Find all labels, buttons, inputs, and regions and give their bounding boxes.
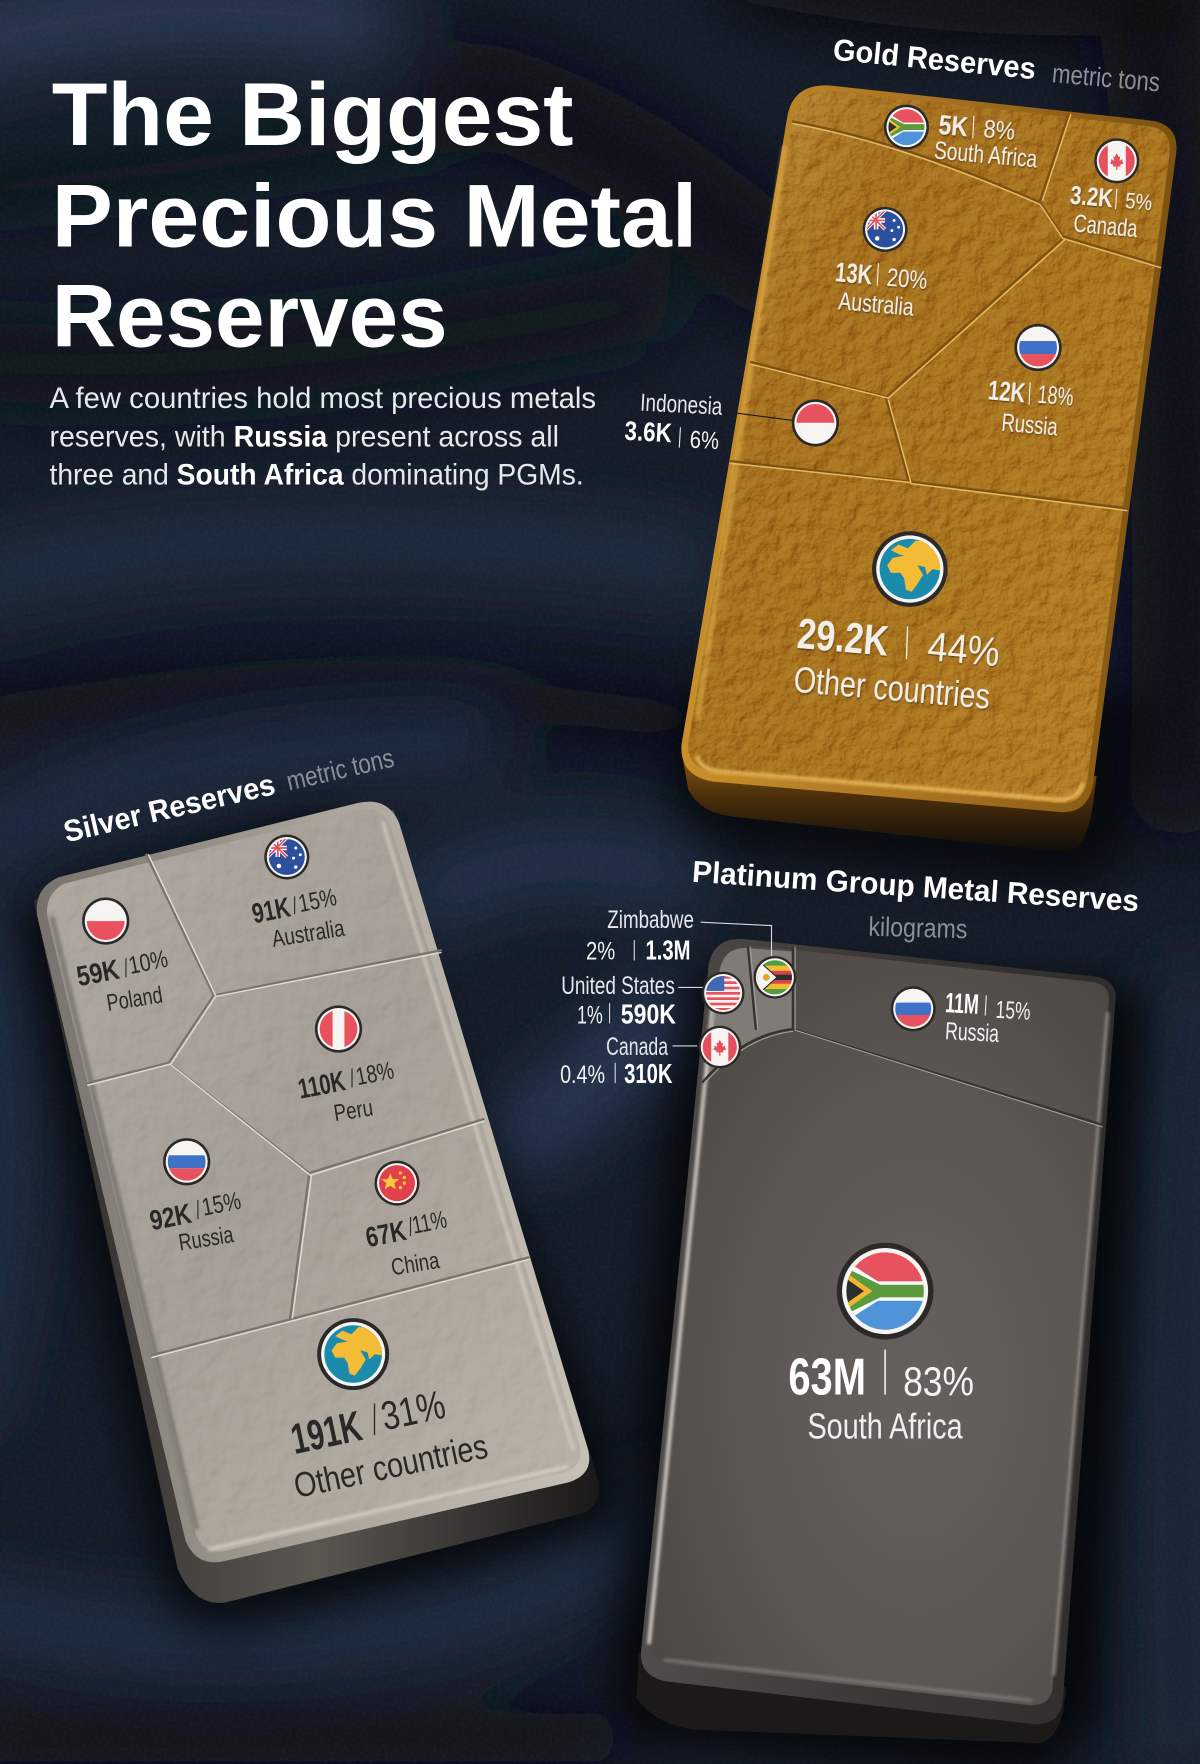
platinum: canada: Canada [606, 1034, 668, 1061]
heading: gold reserves: Gold Reserves [832, 34, 1037, 86]
platinum: canada: 0.4% [560, 1062, 605, 1089]
silver: poland: 10% [126, 946, 170, 980]
silver: russia: 15% [200, 1188, 243, 1222]
platinum: united states: 1% [577, 1002, 603, 1029]
subtitle text block: reserves, with Russia present across all [49, 421, 559, 453]
gold: russia: 18% [1036, 382, 1075, 412]
heading: gold reserves [832, 34, 1161, 97]
heading: silver reserves: Silver Reserves [61, 768, 278, 849]
gold: australia [834, 207, 928, 322]
silver bar [17, 802, 624, 1628]
gold: russia: 12K [987, 374, 1027, 409]
title [52, 65, 697, 365]
platinum: united states: United States [561, 973, 675, 1000]
subtitle text block: A few countries hold most precious metals [49, 383, 596, 415]
title: Reserves [52, 266, 448, 365]
silver: other countries [287, 1318, 491, 1506]
silver: china: China [389, 1248, 442, 1281]
gold: other countries: 29.2K [795, 610, 890, 666]
title: The Biggest [52, 65, 574, 164]
silver: peru [296, 1005, 396, 1127]
gold: south africa: 5K [937, 109, 970, 142]
gold: south africa: 8% [982, 116, 1016, 146]
silver: china [363, 1161, 449, 1281]
platinum: south africa: 83% [903, 1359, 974, 1405]
platinum: russia: Russia [944, 1018, 1000, 1048]
platinum: south africa: 63M [788, 1348, 866, 1406]
subtitle text block [49, 383, 596, 492]
platinum: canada [560, 1026, 741, 1089]
panel: platinum group metal reserves [560, 856, 1147, 1764]
platinum: zimbabwe: 2% [586, 938, 615, 965]
gold: other countries: 44% [926, 623, 1002, 675]
silver: russia: Russia [177, 1222, 236, 1257]
platinum: zimbabwe: 1.3M [646, 934, 691, 965]
gold: russia [987, 324, 1075, 442]
silver: australia: 15% [296, 884, 339, 918]
silver: peru: 18% [354, 1057, 396, 1091]
silver: poland: 59K [74, 954, 122, 992]
platinum: russia [891, 986, 1031, 1048]
gold: indonesia: Indonesia [640, 390, 723, 421]
gold: south africa [884, 105, 1039, 174]
silver: other countries: Other countries [290, 1427, 491, 1506]
heading: silver reserves [61, 743, 397, 849]
panel: silver reserves [17, 743, 624, 1628]
platinum bar [613, 939, 1147, 1764]
platinum: zimbabwe [586, 907, 796, 999]
heading: platinum group metal reserves: Platinum Group Metal Reserves [691, 856, 1140, 918]
silver: other countries: 191K [287, 1402, 366, 1464]
platinum: south africa [788, 1243, 974, 1446]
gold: indonesia: 3.6K [624, 416, 673, 448]
gold: australia: 13K [834, 256, 874, 290]
gold: other countries: Other countries [792, 659, 992, 717]
platinum: south africa: South Africa [807, 1405, 963, 1446]
platinum: russia: 11M [944, 987, 980, 1020]
gold bar [664, 85, 1177, 888]
heading: silver reserves: metric tons [284, 743, 397, 796]
heading: gold reserves: metric tons [1051, 58, 1161, 97]
silver: china: 67K [363, 1215, 409, 1253]
gold: other countries [792, 531, 1002, 717]
gold: canada: Canada [1072, 211, 1139, 243]
silver: australia: Australia [270, 916, 347, 953]
silver: australia: 91K [249, 891, 293, 929]
platinum: zimbabwe: Zimbabwe [607, 907, 694, 934]
platinum: united states: 590K [621, 998, 676, 1029]
platinum: russia: 15% [995, 997, 1031, 1026]
gold: canada [1069, 138, 1153, 243]
silver: peru: Peru [332, 1095, 375, 1127]
silver: other countries: 31% [377, 1381, 449, 1439]
silver: russia [147, 1138, 243, 1257]
gold: australia: 20% [886, 265, 928, 295]
silver: russia: 92K [147, 1198, 194, 1236]
gold: indonesia: 6% [689, 427, 720, 455]
silver: china: 11% [410, 1206, 449, 1240]
gold: south africa: South Africa [933, 138, 1039, 174]
gold: indonesia [624, 390, 839, 455]
silver: peru: 110K [296, 1065, 348, 1105]
silver: poland [74, 897, 170, 1017]
gold: australia: Australia [837, 288, 915, 322]
platinum: canada: 310K [624, 1058, 673, 1089]
subtitle text block: three and South Africa dominating PGMs. [49, 460, 584, 492]
panel: gold reserves [624, 34, 1177, 888]
gold: russia: Russia [1000, 410, 1059, 442]
gold: canada: 5% [1124, 188, 1153, 215]
heading: platinum group metal reserves: kilograms [868, 912, 968, 944]
platinum: united states [561, 972, 745, 1029]
title: Precious Metal [52, 166, 697, 265]
silver: australia [249, 834, 347, 953]
gold: canada: 3.2K [1069, 182, 1114, 213]
silver: poland: Poland [105, 983, 164, 1017]
